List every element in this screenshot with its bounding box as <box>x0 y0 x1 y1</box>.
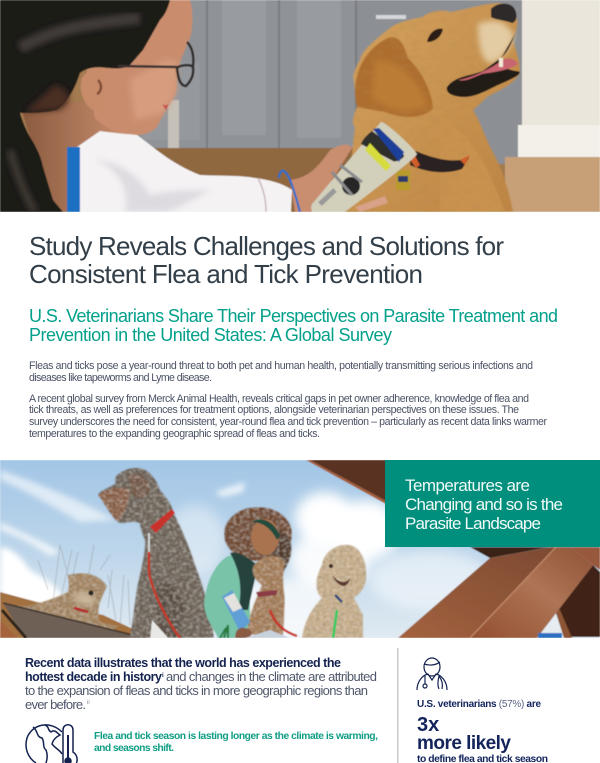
callout: temperatures: Parasite Landscape <box>405 514 541 533</box>
survey paragraph <box>29 393 547 440</box>
title: Study Reveals Challenges and Solutions for <box>29 231 504 261</box>
red collar and leash <box>150 509 175 533</box>
survey paragraph: temperatures to the expanding geographic spread of fleas and ticks. <box>29 428 320 440</box>
text block: hottest decade: ii <box>87 700 90 706</box>
woman <box>224 507 292 572</box>
skin, hand <box>290 145 352 212</box>
collar and tag <box>410 151 469 172</box>
clouds <box>0 470 490 642</box>
rust roof <box>310 460 386 501</box>
curly dog <box>302 545 366 638</box>
text block: flea and tick season <box>94 731 378 754</box>
subtitle: U.S. Veterinarians Share Their Perspectives on Parasite Treatment and <box>29 306 558 326</box>
ear <box>80 72 94 110</box>
glasses <box>118 66 177 67</box>
survey paragraph: survey underscores the need for consistent, year-round flea and tick prevention – particularly as recent data links warmer <box>29 416 547 428</box>
text block: hottest decade: Recent data illustrates that the world has experienced the <box>25 656 341 670</box>
left rust ledge <box>0 592 135 638</box>
hair <box>0 0 170 212</box>
title: Consistent Flea and Tick Prevention <box>29 259 423 289</box>
intro paragraph: Fleas and ticks pose a year-round threat to both pet and human health, potentially transmitting serious infections and <box>29 360 533 372</box>
stat: veterinarians 3x more likely: 3x <box>417 714 439 736</box>
cord <box>279 171 300 212</box>
ramp <box>3 603 145 638</box>
small left dog <box>18 573 118 631</box>
bottle <box>222 590 250 632</box>
neck and back skin <box>22 102 122 212</box>
icon: veterinarian <box>417 658 447 690</box>
text block: hottest decade: i <box>162 673 164 679</box>
stat: veterinarians 3x more likely <box>417 699 548 763</box>
hoodie <box>204 555 250 638</box>
dog <box>345 3 520 212</box>
text block: hottest decade: hottest decade in history <box>25 670 162 684</box>
beams <box>558 610 600 637</box>
survey paragraph: tick threats, as well as preferences for treatment options, alongside veterinarian perspectives on these issues. The <box>29 404 519 416</box>
stat: veterinarians 3x more likely: more likely <box>417 733 511 754</box>
face <box>85 0 192 135</box>
text block: hottest decade <box>25 656 377 712</box>
survey paragraph: A recent global survey from Merck Animal Health, reveals critical gaps in pet owner adherence, knowledge of flea and <box>29 393 529 405</box>
intro paragraph <box>29 360 533 384</box>
vet coat <box>77 131 292 212</box>
callout: temperatures: Temperatures are <box>405 476 530 495</box>
subtitle <box>29 306 558 345</box>
muzzle, nose, mouth, eye <box>491 4 516 23</box>
small middle dog <box>247 556 285 635</box>
subtitle: Prevention in the United States: A Global Survey <box>29 325 392 345</box>
text block: flea and tick season: Flea and tick season is lasting longer as the climate is warming, <box>94 731 378 742</box>
callout: temperatures <box>385 460 600 547</box>
text block: hottest decade: ever before. <box>25 697 86 712</box>
callout: temperatures: Changing and so is the <box>405 495 563 514</box>
text block: hottest decade: and changes in the climate are attributed <box>166 669 377 684</box>
tall dog <box>98 468 214 638</box>
stat: veterinarians 3x more likely: U.S. veterinarians (57%) are <box>417 699 541 710</box>
text block: hottest decade: to the expansion of fleas and ticks in more geographic regions than <box>25 683 368 698</box>
scanner <box>311 122 417 212</box>
cabinets <box>138 0 356 149</box>
grass <box>38 545 130 625</box>
photo: woman with dogs under sky <box>0 460 600 642</box>
photo: veterinarian scanning golden retriever <box>0 0 600 212</box>
icon: globe with thermometer <box>26 725 77 763</box>
wall, baseboard and floor <box>522 0 600 125</box>
title <box>29 231 504 289</box>
intro paragraph: diseases like tapeworms and Lyme disease. <box>29 372 212 384</box>
text block: flea and tick season: and seasons shift. <box>94 743 174 754</box>
